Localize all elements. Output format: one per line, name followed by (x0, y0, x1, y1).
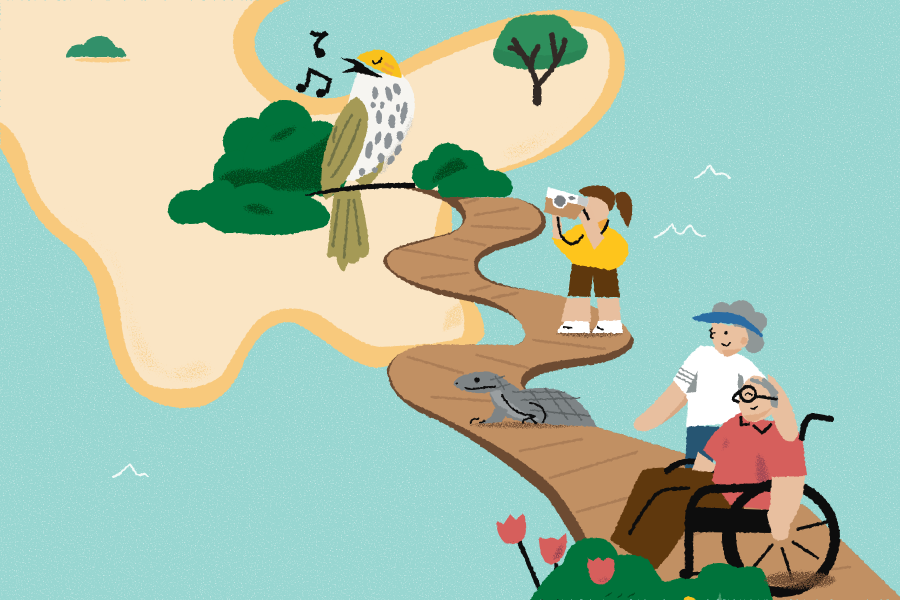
flowers: tulips (497, 513, 597, 600)
girl legs (561, 298, 621, 322)
wheel shadow on boardwalk (762, 570, 838, 590)
boardwalk planks (400, 199, 850, 570)
girl ponytail (615, 192, 632, 228)
woman arm (634, 378, 692, 431)
woman hair (712, 300, 767, 353)
woman hand on shoulder (768, 374, 798, 441)
lizard body (453, 372, 597, 427)
icon: small distant tree (66, 36, 131, 62)
bird head (357, 50, 402, 78)
woman standing with visor (634, 300, 770, 470)
woman shirt (673, 346, 770, 427)
bird eye (373, 58, 382, 64)
island: sand and shoreline (0, 0, 625, 408)
bush: left cluster (168, 100, 347, 235)
woman face (711, 322, 748, 355)
lizard scale pattern (490, 376, 590, 420)
water ripples (113, 165, 730, 477)
bird body (342, 72, 415, 181)
woman facial features (710, 328, 730, 346)
boardwalk (383, 186, 900, 600)
icon: music notes (296, 33, 330, 98)
bird wing (321, 97, 385, 200)
girl camera strap (558, 207, 608, 244)
man hair (752, 380, 776, 393)
boardwalk stipple around girl (552, 327, 628, 339)
man upper arm (767, 476, 805, 540)
man shirt (703, 412, 807, 510)
girl collar (592, 218, 608, 232)
man glasses (733, 386, 776, 409)
bush: right cluster (412, 143, 512, 197)
bird: singing honeyeater (321, 50, 415, 271)
wheelchair armrest wheel (667, 461, 713, 471)
man trousers (610, 467, 745, 570)
girl face (584, 196, 610, 227)
bird tail (327, 190, 369, 271)
bird breast spots (359, 82, 409, 176)
tulip shading (502, 535, 566, 564)
wheel (727, 484, 835, 592)
bird beak (340, 58, 383, 78)
girl hair (578, 185, 615, 211)
icon: tree on far headland (493, 15, 588, 105)
woman trousers (685, 425, 719, 470)
girl shoes (557, 320, 623, 333)
man collar (741, 416, 772, 433)
girl with camera (544, 185, 632, 333)
woman visor (692, 312, 763, 338)
wheelchair frame (679, 416, 831, 580)
man forearm (692, 452, 718, 472)
man head (739, 376, 778, 422)
girl shorts (568, 263, 620, 297)
branch (305, 183, 415, 196)
lizard: shingleback (453, 372, 597, 430)
girl shirt (552, 222, 628, 270)
camera (544, 187, 589, 220)
lizard limbs and mouth (478, 405, 508, 424)
bush: foreground shrub (530, 538, 773, 600)
girl arms (552, 212, 563, 240)
man in wheelchair (610, 374, 835, 592)
